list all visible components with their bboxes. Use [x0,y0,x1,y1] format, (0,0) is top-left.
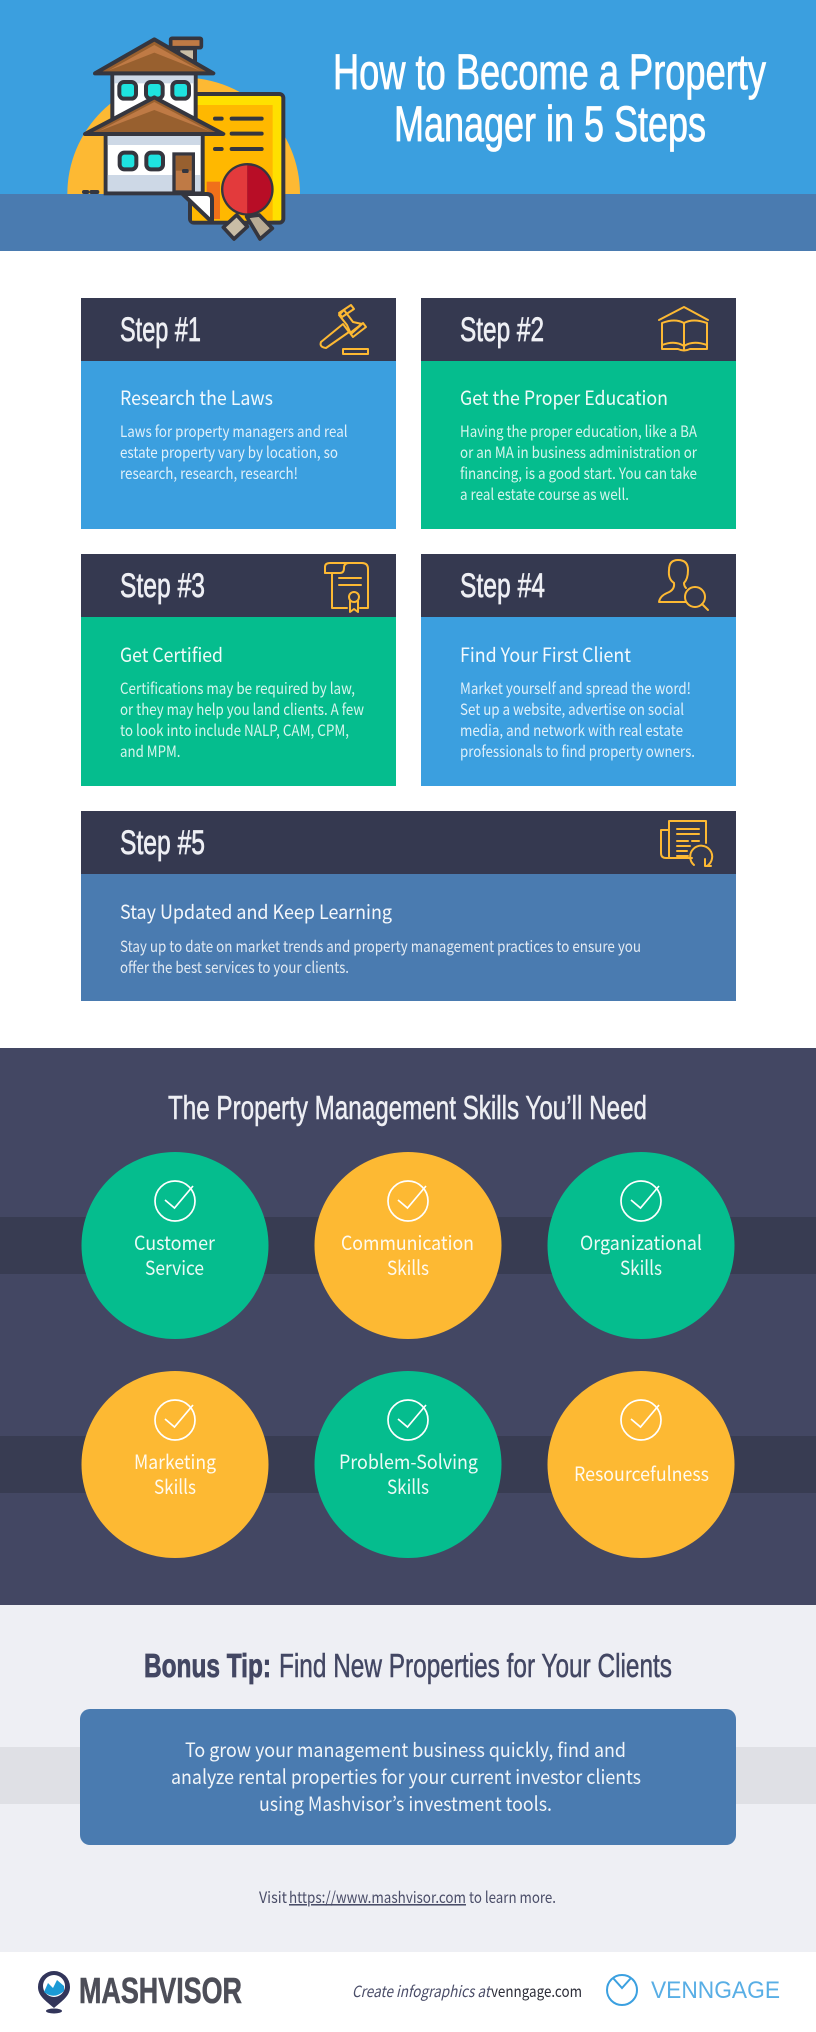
panel: step 2 [421,298,736,529]
text: visit link: https://www.mashvisor.com [289,1886,466,1908]
heading: step 2: Step #2 [460,311,544,349]
skill: resourcefulness: Resourcefulness [574,1458,709,1487]
skill: problem solving [314,1371,502,1558]
callout: bonus tip text: analyze rental properties for your current investor clients [171,1761,641,1790]
heading: step 5: Step #5 [120,824,205,862]
skill: marketing: Marketing [134,1446,216,1475]
heading: step 4: Step #4 [460,567,545,605]
skill: problem solving: Skills [387,1471,429,1500]
skill: communication: Communication [341,1227,474,1256]
panel: step 5 [81,811,736,1001]
panel: step 1 [81,298,396,529]
skill: communication [314,1152,502,1339]
text: step 2 body: Having the proper education, like a BA [460,420,697,442]
heading: step 3: Step #3 [120,567,205,605]
skill: communication: Skills [387,1252,429,1281]
panel: header [0,0,816,251]
callout: bonus tip text: using Mashvisor’s investment tools. [259,1788,552,1817]
skill: organizational [548,1152,734,1339]
heading: bonus tip: Find New Properties for Your Clients [279,1647,672,1684]
icon: person with magnifier [659,560,708,610]
text: visit link: to learn more. [469,1886,556,1908]
logo: mashvisor: MASHVISOR [79,1970,242,2011]
icon: book under roof [659,307,708,350]
text: step 3 body: and MPM. [120,740,180,762]
text: step 3 body: or they may help you land clients. A few [120,698,364,720]
text: step 5 body: offer the best services to your clients. [120,956,349,978]
text: step 3 body: to look into include NALP, CAM, CPM, [120,719,349,741]
skill: organizational: Organizational [580,1227,702,1256]
text: step 3 body [120,639,364,762]
text: visit link [259,1886,556,1908]
panel: bonus tip [0,1605,816,1952]
text: step 1 body: research, research, research! [120,462,298,484]
skill: customer service: Customer [134,1227,215,1256]
text: step 2 body: or an MA in business administration or [460,441,698,463]
panel: skills [0,1048,816,1605]
panel: step 4 [421,554,736,786]
skill: marketing: Skills [154,1471,196,1500]
text: step 2 body: financing, is a good start. You can take [460,462,697,484]
text: venngage credit: Create infographics at [352,1980,492,2002]
text: step 2 body [460,382,698,505]
logo: venngage [607,1975,780,2005]
text: step 2 body: a real estate course as well. [460,483,629,505]
logo: venngage: VENNGAGE [651,1977,780,2004]
text: step 5 body [120,896,641,978]
text: step 4 body: Find Your First Client [460,639,632,668]
icon: house and certificate illustration [67,38,300,239]
text: step 2 body: Get the Proper Education [460,382,668,411]
text: step 1 body: estate property vary by location, so [120,441,338,463]
text: step 4 body: Market yourself and spread the word! [460,677,691,699]
title: Manager in 5 Steps [394,96,706,152]
text: step 5 body: Stay Updated and Keep Learning [120,896,392,925]
title [333,44,766,152]
text: step 4 body: media, and network with real estate [460,719,683,741]
skill: customer service: Service [145,1252,204,1281]
callout: bonus tip text [80,1709,736,1845]
skill: resourcefulness [548,1371,734,1558]
logo: mashvisor [38,1970,242,2014]
text: step 4 body: Set up a website, advertise on social [460,698,684,720]
text: venngage credit: venngage.com [491,1980,582,2002]
skill: marketing [82,1371,268,1558]
icon: gavel [321,305,368,354]
text: step 3 body: Get Certified [120,639,223,668]
footer [38,1970,780,2014]
text: venngage credit [352,1980,582,2002]
text: step 1 body [120,382,348,484]
skill: customer service [82,1152,268,1339]
text: step 4 body: professionals to find property owners. [460,740,695,762]
heading: step 1: Step #1 [120,311,201,349]
text: visit link: Visit [259,1886,287,1908]
text: step 1 body: Laws for property managers and real [120,420,348,442]
text: step 4 body [460,639,695,762]
heading: skills: The Property Management Skills You’ll Need [168,1090,647,1127]
heading: bonus tip: Bonus Tip: [144,1647,271,1684]
heading: bonus tip [144,1647,672,1684]
text: step 1 body: Research the Laws [120,382,273,411]
icon: document with refresh arrow [661,821,712,866]
icon: scroll certificate [325,563,368,612]
panel: step 3 [81,554,396,786]
skill: organizational: Skills [620,1252,662,1281]
text: step 3 body: Certifications may be required by law, [120,677,355,699]
text: step 5 body: Stay up to date on market trends and property management practices to ensure you [120,935,641,957]
skill: problem solving: Problem-Solving [339,1446,478,1475]
callout: bonus tip text: To grow your management business quickly, find and [185,1734,626,1763]
